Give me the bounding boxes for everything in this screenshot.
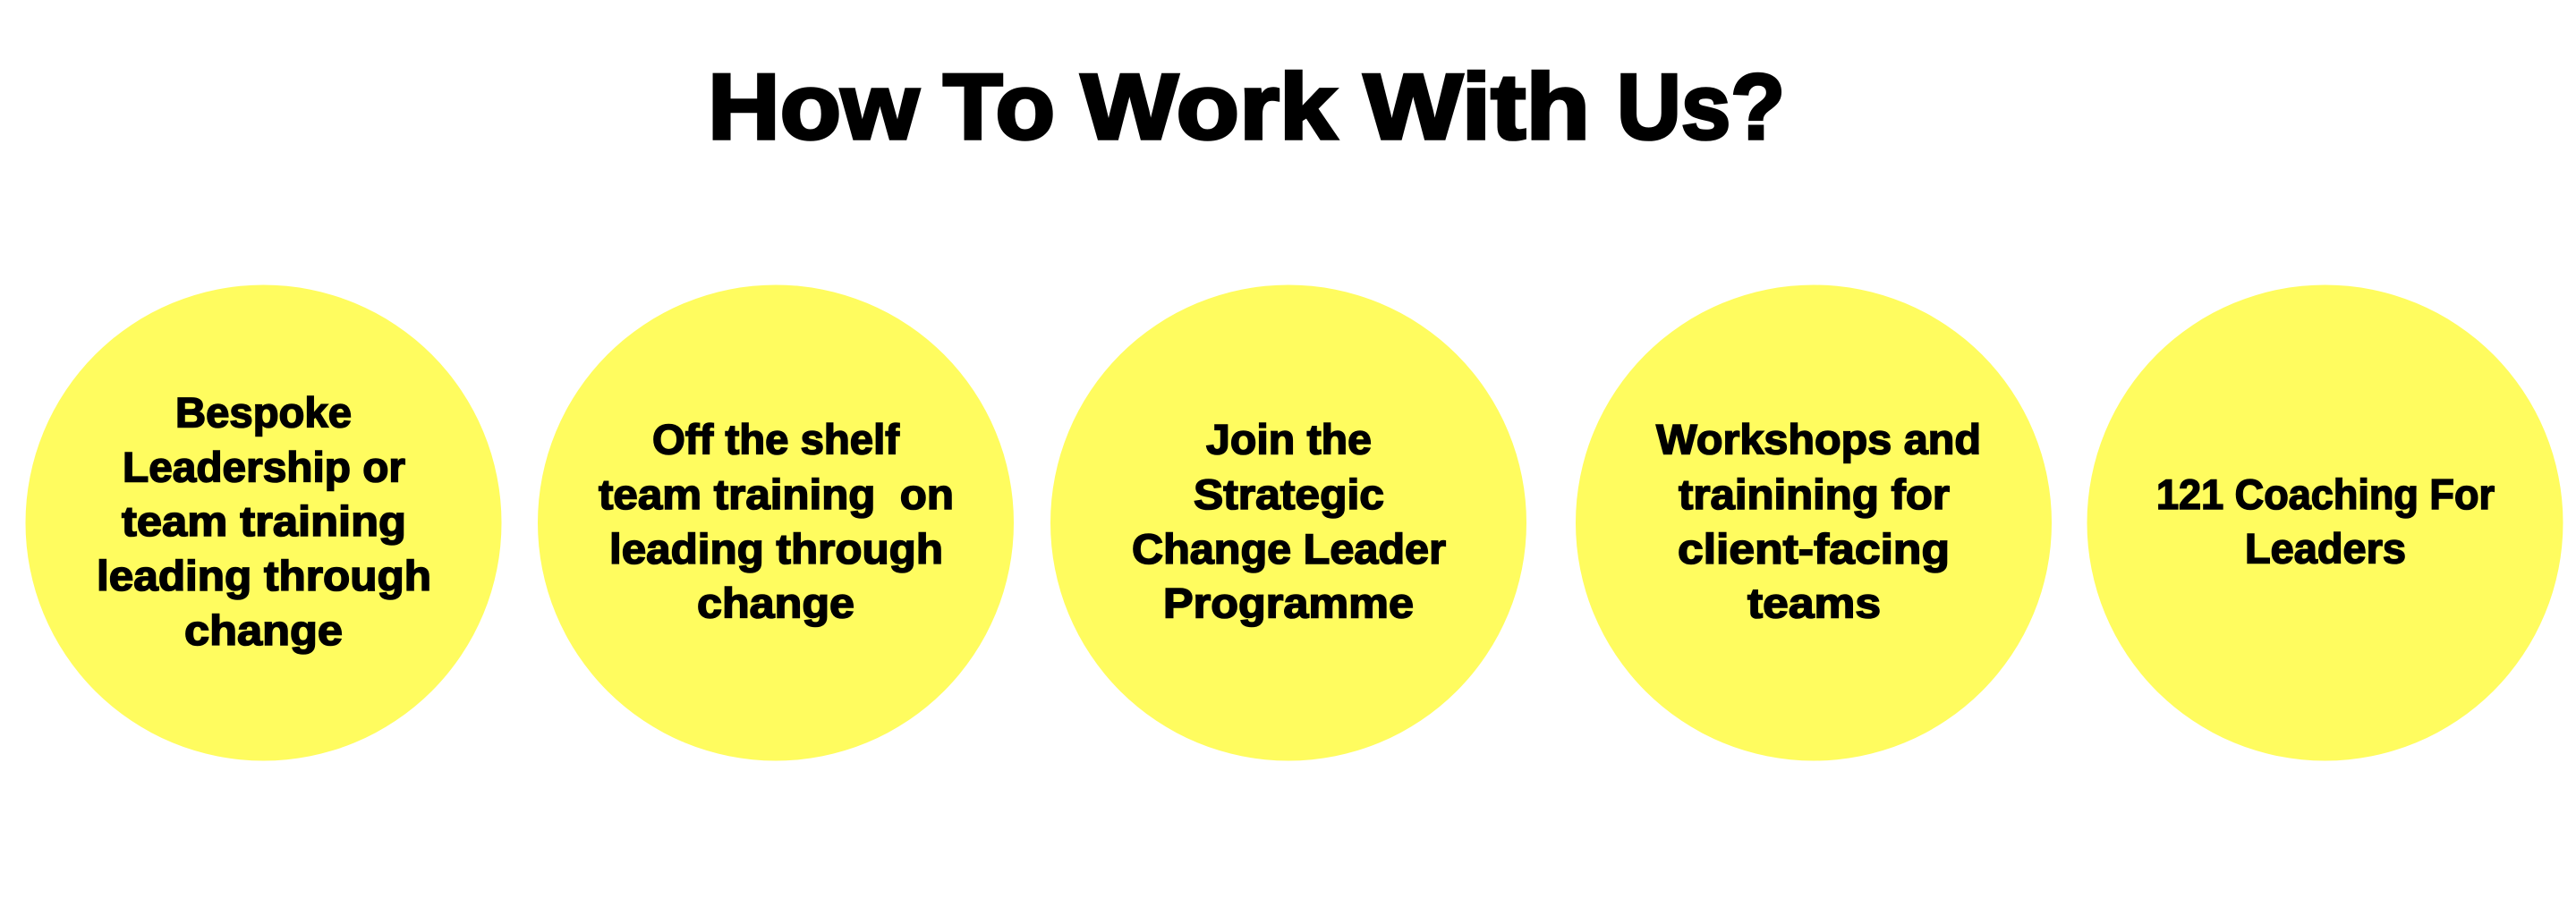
circle: workshops [1576, 284, 2052, 760]
circle: off the shelf [538, 284, 1014, 760]
text block: bespoke: team training [122, 497, 406, 545]
title [708, 55, 1785, 159]
text block: bespoke [97, 388, 431, 654]
circle: 121 coaching [2087, 284, 2563, 760]
text block: strategic change leader: Join the [1206, 415, 1372, 463]
text block: strategic change leader [1132, 415, 1446, 626]
text block: bespoke: Leadership or [123, 444, 405, 490]
text block: strategic change leader: Strategic [1194, 470, 1384, 518]
title: Work [1081, 55, 1337, 159]
text block: workshops: trainining for [1679, 470, 1950, 518]
text block: bespoke: Bespoke [175, 388, 352, 437]
panel: 121 coaching [2087, 284, 2563, 760]
text block: 121 coaching: Leaders [2245, 524, 2406, 572]
panel: strategic change leader programme [1050, 284, 1526, 760]
text block: workshops: teams [1747, 580, 1881, 626]
text block: strategic change leader: Programme [1163, 580, 1414, 626]
text block: 121 coaching: 121 Coaching For [2156, 470, 2495, 518]
title: To [943, 55, 1055, 159]
text block: off the shelf: change [697, 580, 854, 626]
text block: off the shelf: leading through [609, 525, 943, 572]
text block: off the shelf [599, 415, 954, 626]
circle: bespoke [25, 284, 501, 760]
text block: off the shelf: Off the shelf [652, 415, 899, 463]
panel: workshops and training [1576, 284, 2052, 760]
panel: bespoke leadership or team training [25, 284, 501, 760]
title: How [708, 55, 920, 159]
text block: workshops: Workshops and [1656, 415, 1981, 463]
text block: workshops: client-facing [1678, 525, 1950, 572]
text block: workshops [1656, 415, 1981, 626]
title: With [1364, 55, 1590, 159]
text block: off the shelf: team training on [599, 470, 954, 518]
panel: off the shelf team training [538, 284, 1014, 760]
text block: bespoke: change [184, 606, 343, 654]
text block: strategic change leader: Change Leader [1132, 525, 1446, 572]
title: Us? [1617, 55, 1785, 159]
text block: bespoke: leading through [97, 552, 431, 599]
text block: 121 coaching [2156, 470, 2495, 572]
circle: strategic change leader [1050, 284, 1526, 760]
